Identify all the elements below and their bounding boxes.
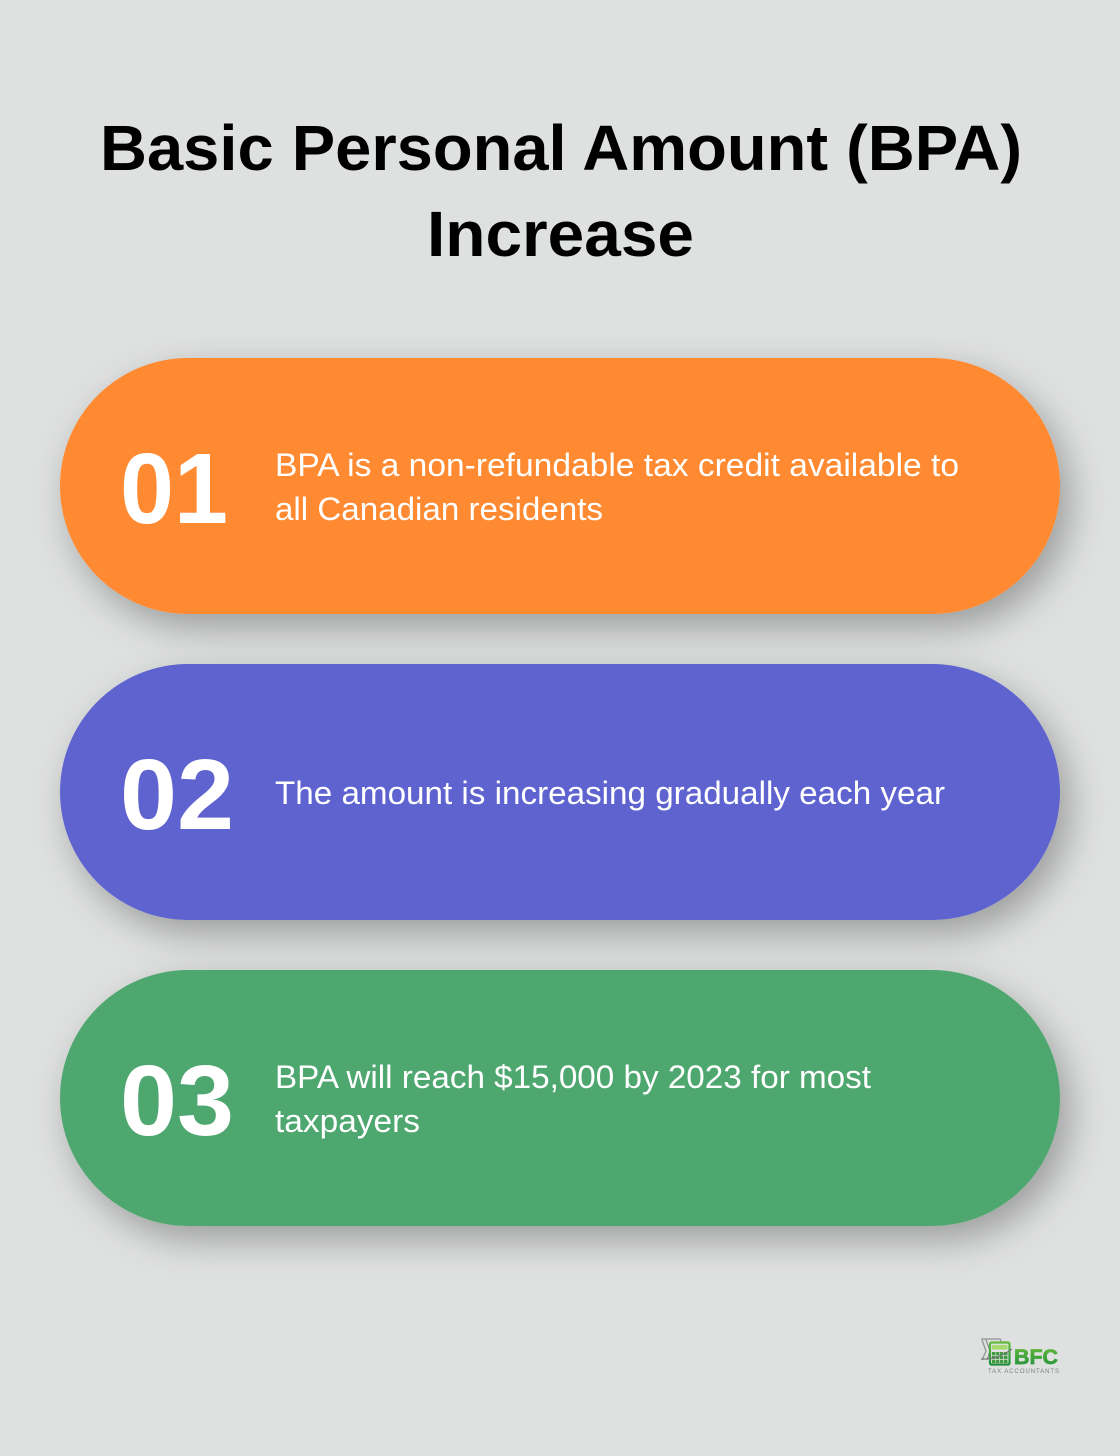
- text: step 03 description: [275, 1059, 871, 1139]
- panel: step 01: [60, 358, 1060, 614]
- title: Increase: [427, 198, 694, 270]
- panel: step 02: [60, 664, 1060, 920]
- text: step 03 description: taxpayers: [275, 1103, 420, 1139]
- number 02: 02: [120, 739, 234, 851]
- text: step 02 description: The amount is increasing gradually each year: [275, 775, 945, 811]
- logo: BFC Tax Accountants: [981, 1339, 1059, 1375]
- title: Basic Personal Amount (BPA): [100, 112, 1022, 184]
- panel: step 03: [60, 970, 1060, 1226]
- text: step 01 description: [275, 447, 959, 527]
- wordmark: BFC: BFC: [1014, 1346, 1058, 1369]
- icon: calculator: [981, 1339, 1012, 1364]
- number 01: 01: [120, 433, 228, 545]
- text: step 03 description: BPA will reach $15,000 by 2023 for most: [275, 1059, 871, 1095]
- number 03: 03: [120, 1045, 234, 1157]
- tagline: Tax Accountants: TAX ACCOUNTANTS: [988, 1369, 1059, 1375]
- text: step 01 description: all Canadian residents: [275, 491, 603, 527]
- title: [100, 112, 1022, 270]
- text: step 01 description: BPA is a non-refundable tax credit available to: [275, 447, 959, 483]
